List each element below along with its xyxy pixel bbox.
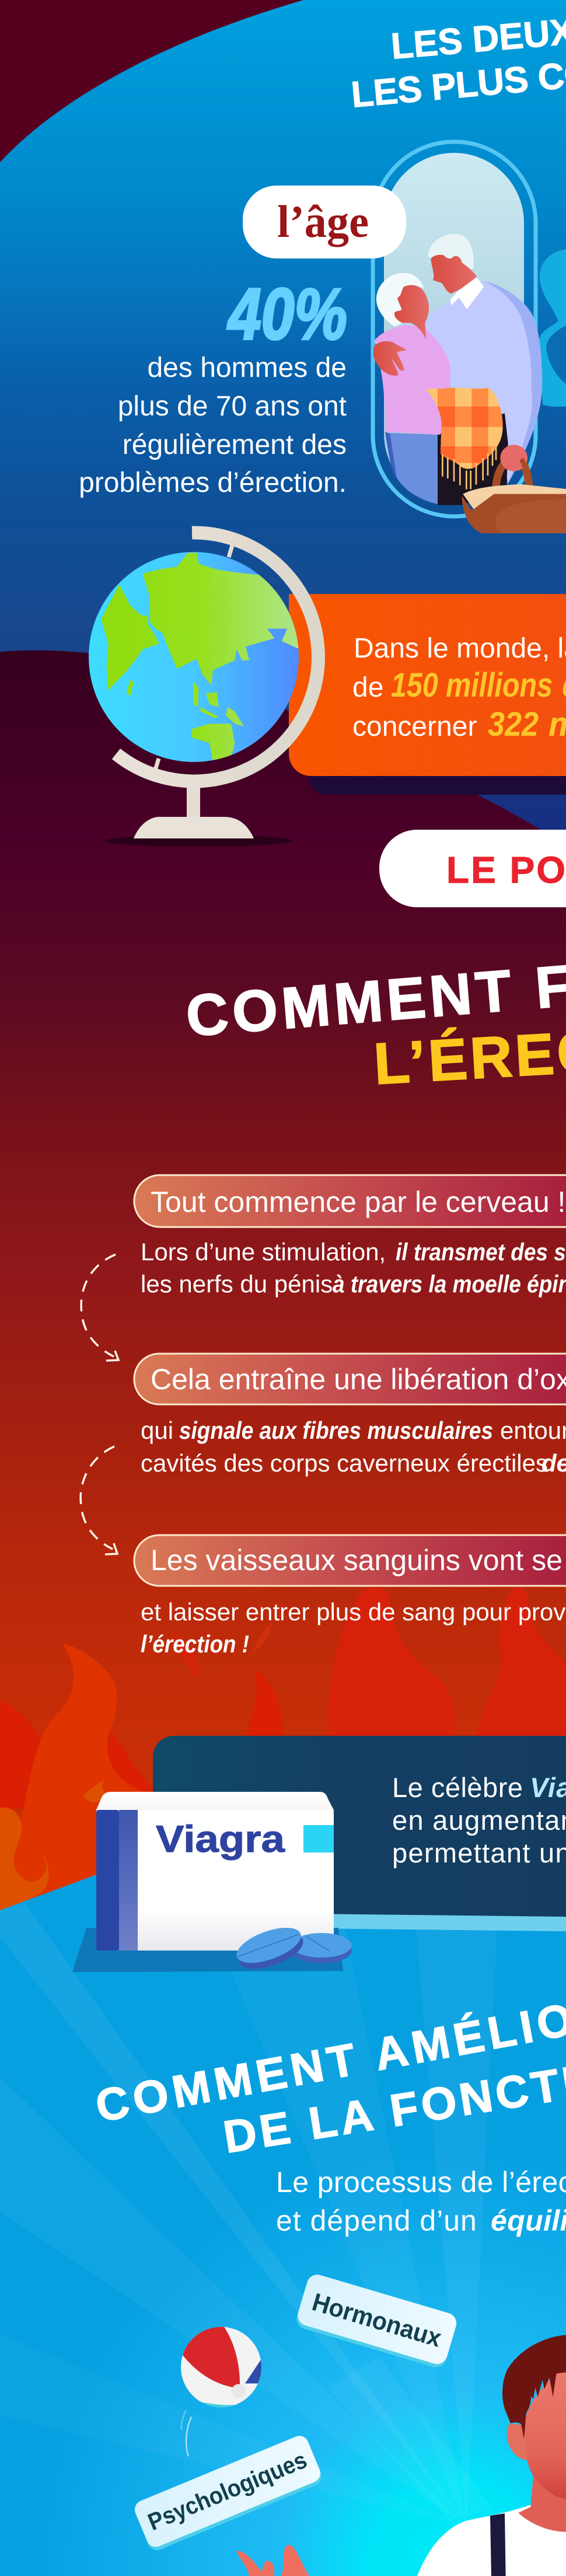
text: step 1 detail xyxy=(141,1238,566,1298)
stand shadow xyxy=(105,835,292,847)
icon: viagra box and pills: Viagra xyxy=(156,1817,285,1860)
panel: viagra explanation xyxy=(153,1736,566,1931)
step 3: vaisseaux sanguins xyxy=(134,1535,566,1658)
flames xyxy=(0,1588,566,1920)
text: age statistic: problèmes d’érection. xyxy=(79,467,347,498)
shirt xyxy=(417,2505,566,2576)
text: world statistic: 322 xyxy=(488,705,539,743)
tag: hormonaux: Hormonaux xyxy=(309,2288,445,2353)
plaid blanket xyxy=(424,385,506,489)
step 2: ocytocine xyxy=(134,1354,566,1477)
background shape right of the frame xyxy=(539,249,566,407)
text: step 3 detail: l’érection ! xyxy=(141,1630,249,1658)
panel: world statistic xyxy=(289,594,566,795)
icon: juggling hand xyxy=(236,2545,309,2576)
icon: viagra box and pills xyxy=(72,1792,352,1976)
icon: elderly couple in arched frame xyxy=(373,142,566,516)
stat: 40%: 40% xyxy=(227,274,347,355)
icon: picnic basket xyxy=(462,445,566,533)
text: erection process intro: et dépend d’un xyxy=(276,2204,477,2237)
hair xyxy=(502,2335,566,2439)
text: step 2 detail: cavités des corps caverneux érectiles xyxy=(141,1449,548,1477)
tag: psychologiques: Psychologiques xyxy=(144,2446,310,2536)
text: erection process intro xyxy=(276,2166,566,2237)
text: age statistic: des hommes de xyxy=(147,352,347,383)
text: viagra explanation: Le célèbre xyxy=(392,1772,523,1803)
text: step 1 detail: Lors d’une stimulation, xyxy=(141,1238,386,1266)
arrow: step 1 to step 2 xyxy=(81,1254,118,1361)
icon: beach ball xyxy=(181,2326,263,2413)
text: step 2 detail: signale aux fibres musculaires xyxy=(179,1417,493,1444)
step 1: le cerveau: Tout commence par le cerveau ! xyxy=(151,1186,565,1218)
text: world statistic: de xyxy=(352,672,383,703)
badge: l'âge: l’âge xyxy=(277,196,369,247)
text: age statistic: régulièrement des xyxy=(123,429,347,460)
illustration: man xyxy=(417,2335,566,2576)
text: step 1 detail: les nerfs du pénis xyxy=(141,1270,333,1298)
tag: hormonaux xyxy=(294,2272,459,2370)
icon: globe xyxy=(89,533,318,847)
arrow: step 2 to step 3 xyxy=(81,1446,117,1554)
pill xyxy=(232,1921,308,1976)
background: bottom blue section xyxy=(0,1815,566,2576)
badge: le point xyxy=(379,830,566,907)
text: age statistic xyxy=(79,352,347,498)
text: step 2 detail: qui xyxy=(141,1417,173,1444)
title: les deux causes xyxy=(350,0,566,116)
badge: l'âge xyxy=(243,186,406,258)
text: step 2 detail xyxy=(141,1417,566,1477)
ear xyxy=(507,2423,527,2460)
background: top-left maroon corner xyxy=(0,0,309,169)
text: viagra explanation xyxy=(392,1772,566,1868)
face xyxy=(525,2369,566,2500)
step 1: le cerveau xyxy=(134,1175,566,1298)
text: step 3 detail xyxy=(141,1598,566,1658)
neck xyxy=(518,2476,566,2532)
pill xyxy=(291,1933,352,1963)
icon: motion lines xyxy=(181,2410,191,2456)
suspender xyxy=(490,2514,506,2576)
text: world statistic: concerner xyxy=(352,711,477,742)
text: world statistic xyxy=(352,633,566,743)
text: age statistic: plus de 70 ans ont xyxy=(118,391,347,422)
background: top blue section xyxy=(0,0,566,845)
background: light rays xyxy=(0,1832,502,2526)
